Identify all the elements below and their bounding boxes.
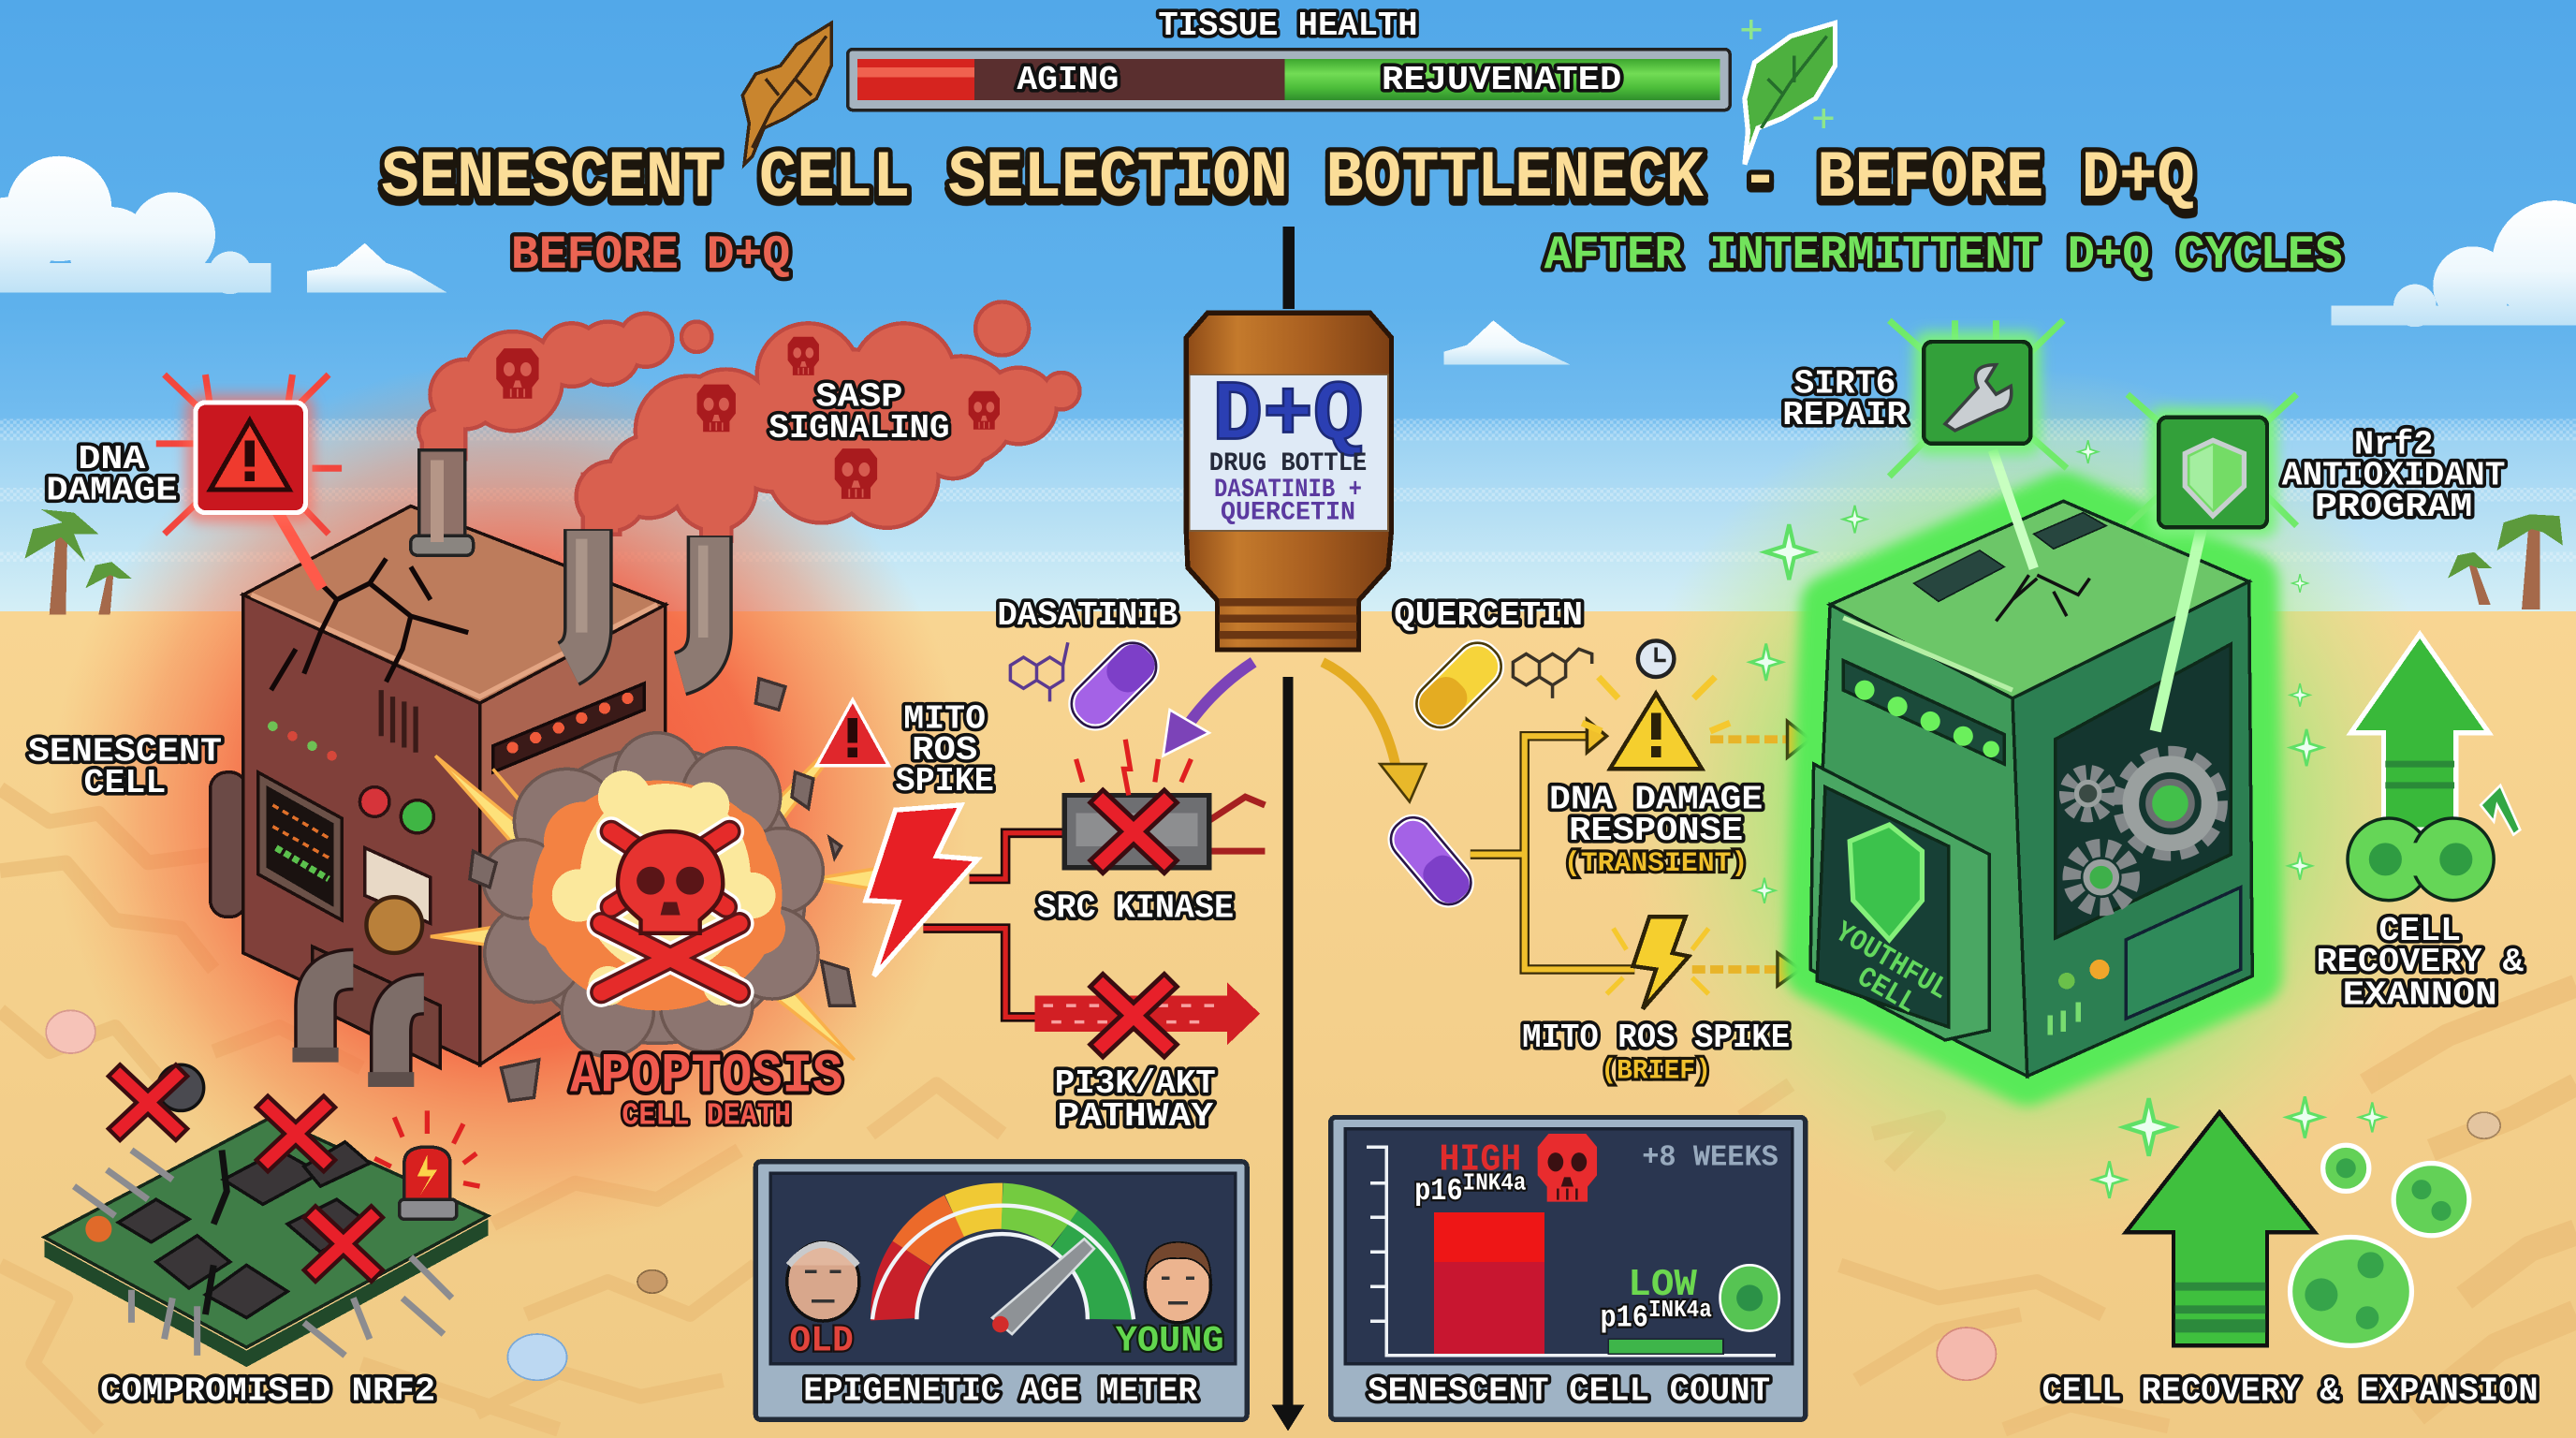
icon: green cell	[1720, 1265, 1779, 1331]
label: youthful cell: YOUTHFUL	[1829, 917, 1954, 1007]
icon: skull	[1538, 1134, 1597, 1202]
panel frame	[755, 1162, 1247, 1419]
label: high: HIGH	[1439, 1139, 1521, 1182]
sensor	[158, 1064, 204, 1110]
bottle neck rings	[1219, 598, 1357, 639]
icon: young face	[1145, 1242, 1211, 1323]
icon: yellow capsule	[1408, 634, 1510, 736]
label: drug bottle: DRUG BOTTLE	[1209, 449, 1367, 478]
label: low: LOW	[1628, 1264, 1698, 1307]
medium cell	[2393, 1164, 2469, 1236]
top vents	[1914, 513, 2106, 601]
panel screen	[1345, 1129, 1793, 1364]
chimney 3	[681, 536, 710, 674]
large cell	[2291, 1238, 2411, 1345]
LED strip	[1843, 661, 2004, 764]
label: mito ROS spike brief: MITO ROS SPIKE	[1522, 1019, 1790, 1057]
label: cell recovery & exannon: RECOVERY &	[2317, 943, 2524, 981]
label: old: OLD	[789, 1321, 854, 1362]
top cracks	[1996, 575, 2089, 621]
chimney 1	[411, 450, 474, 555]
label: compromised NRF2: COMPROMISED NRF2	[100, 1372, 435, 1410]
panel frame	[1331, 1117, 1806, 1419]
label: PI3K/AKT pathway	[1055, 1064, 1216, 1136]
bottle body	[1186, 312, 1392, 649]
title: SENESCENT CELL SELECTION BOTTLENECK - BEFORE D+Q	[381, 142, 2195, 216]
meter frame	[848, 50, 1730, 110]
label: senescent cell count: SENESCENT CELL COUNT	[1368, 1372, 1770, 1410]
label: dasatinib +: DASATINIB +	[1214, 476, 1362, 505]
dial plate	[365, 848, 431, 923]
top face	[1830, 501, 2249, 698]
rusty gear	[366, 897, 422, 953]
label: D+Q: D+Q	[1212, 369, 1364, 465]
label: epigenetic age meter: EPIGENETIC AGE METER	[803, 1372, 1198, 1410]
sand background	[0, 611, 2576, 1438]
icon: yellow warning triangle	[1582, 677, 1730, 769]
senescent cell factory	[211, 450, 710, 1079]
glow: red around senescent cell	[50, 361, 970, 1249]
chart axes	[1367, 1147, 1776, 1356]
icon: SRC kinase chip	[1064, 740, 1265, 873]
small cell	[2323, 1145, 2369, 1191]
label: p16 high: INK4a	[1463, 1169, 1527, 1197]
crack	[205, 1151, 227, 1314]
label: senescent cell: SENESCENT	[28, 733, 222, 771]
smoke skulls	[496, 337, 1000, 499]
palm trees left	[24, 509, 131, 614]
red X marks	[109, 1064, 383, 1282]
green energy beam in window	[2156, 529, 2202, 731]
machine top face	[243, 506, 666, 703]
icon: yellow lightning bolt	[1606, 917, 1708, 1009]
explosion	[431, 679, 912, 1101]
chip burn mark	[85, 1216, 111, 1242]
label: quercetin: QUERCETIN	[1221, 499, 1355, 528]
label: mito ROS spike	[896, 699, 994, 800]
label: DNA damage	[46, 440, 178, 510]
icon: dividing cell	[2348, 818, 2494, 901]
meter dark fill	[857, 59, 1284, 100]
bar: high	[1434, 1212, 1544, 1354]
label: youthful cell: CELL	[1851, 961, 1922, 1021]
cloud: far left	[0, 156, 271, 294]
arrow: DNA damage to cell	[1710, 721, 1810, 757]
red and green buttons	[359, 787, 433, 833]
label: cell recovery & exannon	[2317, 912, 2524, 1014]
arrow: ROS spike to cell	[1692, 953, 1801, 986]
label: SRC kinase: SRC KINASE	[1036, 888, 1234, 927]
arrow: yellow curved	[1323, 662, 1426, 801]
panel screen	[770, 1173, 1236, 1364]
heading: after D+Q cycles: AFTER INTERMITTENT D+Q CYCLES	[1544, 229, 2343, 283]
gauge needle	[992, 1239, 1094, 1334]
top face highlight	[252, 594, 657, 697]
label: apoptosis: APOPTOSIS	[570, 1044, 842, 1108]
label: DNA damage: DNA	[78, 440, 146, 478]
energy rays	[431, 714, 912, 1084]
board side	[44, 1219, 488, 1367]
icon: green leaf	[1741, 20, 1835, 165]
expanding cells	[2291, 1145, 2469, 1345]
yellow branch lines	[1471, 736, 1634, 969]
label: p16 high: p16	[1414, 1174, 1471, 1210]
label: DNA damage response	[1549, 780, 1763, 879]
icon: dead leaf	[742, 23, 831, 165]
shield icon	[1850, 825, 1922, 940]
gauge outline	[872, 1206, 1134, 1319]
label: Nrf2 antioxidant program: Nrf2	[2354, 425, 2433, 463]
label: cell recovery & expansion: CELL RECOVERY & EXPANSION	[2042, 1372, 2539, 1410]
machine left face	[243, 594, 480, 1064]
lower pipes	[292, 969, 424, 1079]
access panel	[313, 946, 440, 1068]
broken connector pins	[74, 1151, 452, 1356]
label: cell recovery & exannon: EXANNON	[2343, 976, 2497, 1014]
cloud: left small	[307, 243, 446, 292]
label: Nrf2 antioxidant program: PROGRAM	[2315, 488, 2472, 526]
left face	[1814, 605, 2027, 1077]
bottom right vent panel	[2126, 888, 2241, 1019]
fire core	[552, 770, 775, 1005]
vents	[381, 690, 416, 753]
right face	[2012, 581, 2252, 1077]
arrow heads on branch	[1587, 720, 1606, 753]
label: cell recovery & exannon: CELL	[2378, 912, 2461, 950]
label: p16 low: INK4a	[1648, 1296, 1712, 1324]
machine monitor	[258, 772, 342, 920]
label: DNA damage: DAMAGE	[46, 472, 178, 510]
icon: curved arrow	[2481, 785, 2520, 835]
machine right face	[480, 605, 666, 1064]
icon: PI3K/AKT pathway arrow	[1035, 974, 1260, 1057]
label: DNA damage response: (TRANSIENT)	[1564, 847, 1748, 879]
panel: epigenetic age meter	[755, 1162, 1247, 1419]
central divider arrow	[1271, 227, 1305, 1431]
palm trees right	[2448, 514, 2563, 609]
siren sparks	[374, 1110, 480, 1186]
arrow: up to cell division	[2351, 634, 2489, 829]
label: aging: AGING	[1017, 61, 1119, 99]
neon outline glow	[1814, 501, 2252, 1077]
sparkles around youthful cell	[1750, 440, 2322, 903]
fire ring	[529, 781, 785, 1010]
label: SIRT6 repair	[1782, 364, 1908, 434]
SIRT6 beam	[1993, 450, 2034, 568]
icon: ROS warning triangle	[816, 700, 889, 766]
label: SASP signaling	[768, 377, 949, 448]
label: Nrf2 antioxidant program: ANTIOXIDANT	[2282, 457, 2505, 495]
label: mito ROS spike brief: (BRIEF)	[1601, 1054, 1711, 1086]
label: cell death: CELL DEATH	[622, 1098, 791, 1134]
D+Q drug bottle	[1186, 312, 1392, 650]
youthful cell machine	[1810, 450, 2252, 1077]
icon: old face	[787, 1242, 859, 1321]
label: mito ROS spike brief	[1522, 1019, 1790, 1086]
icon: purple capsule (active)	[1383, 810, 1479, 913]
shells on the sand	[46, 1010, 2500, 1380]
label: PI3K/AKT pathway: PI3K/AKT	[1055, 1064, 1216, 1103]
red alarm siren	[400, 1147, 457, 1219]
left side pipe	[211, 772, 246, 917]
icon: DNA damage alert	[156, 374, 342, 534]
sand ripples	[0, 788, 2576, 1430]
label: SIRT6 repair: SIRT6	[1794, 364, 1895, 403]
chips	[118, 1142, 370, 1318]
label: rejuvenated: REJUVENATED	[1382, 61, 1621, 99]
label: SASP signaling: SASP	[815, 377, 902, 416]
label: senescent cell	[28, 733, 222, 802]
gears	[2067, 759, 2215, 907]
gauge arc	[894, 1206, 1110, 1319]
shield screen	[1817, 787, 1949, 1027]
bar: low	[1608, 1339, 1723, 1354]
cracks on top	[271, 559, 468, 690]
cloud: centre small	[1444, 320, 1571, 365]
tissue health meter	[848, 7, 1730, 110]
board top	[44, 1117, 488, 1347]
status LEDs	[2050, 960, 2110, 1035]
arrow: purple curved	[1164, 662, 1253, 756]
label: SASP signaling: SIGNALING	[768, 409, 949, 448]
label: young: YOUNG	[1116, 1321, 1224, 1362]
label: mito ROS spike: SPIKE	[896, 762, 994, 800]
icon: Nrf2 shield	[2128, 394, 2297, 537]
big recovery arrow	[2126, 1112, 2315, 1345]
crossbones outline	[601, 831, 739, 992]
label: DNA damage response: DNA DAMAGE	[1549, 780, 1763, 818]
skull and crossbones	[601, 831, 739, 992]
icon: SIRT6 wrench	[1889, 320, 2067, 477]
label: mito ROS spike: MITO	[903, 699, 986, 738]
cloud: right	[2331, 200, 2576, 327]
smoke plumes	[420, 304, 1077, 539]
label: SIRT6 repair: REPAIR	[1782, 396, 1908, 434]
heading: before D+Q: BEFORE D+Q	[511, 229, 790, 283]
LED bar	[493, 683, 644, 772]
smoke puff	[483, 733, 823, 1056]
gear window	[2056, 644, 2231, 938]
glow: green around youthful cell	[1618, 370, 2456, 1240]
icon: quercetin molecule	[1513, 649, 1592, 698]
icon: clock	[1638, 640, 1674, 677]
chimney 2	[568, 529, 588, 664]
icon: red lightning bolt	[866, 805, 977, 976]
label: dasatinib: DASATINIB	[997, 596, 1178, 635]
indicator lights	[268, 721, 337, 761]
top highlight	[1843, 618, 2012, 690]
horizon dither bands	[0, 419, 2576, 562]
heading: tissue health: TISSUE HEALTH	[1158, 7, 1418, 45]
meter green segment	[1284, 59, 1720, 100]
label: +8 weeks: +8 WEEKS	[1642, 1141, 1778, 1174]
label: DNA damage response: RESPONSE	[1569, 812, 1743, 850]
icon: purple capsule	[1062, 634, 1165, 736]
panel: senescent cell count	[1331, 1117, 1806, 1419]
compromised NRF2 circuit board	[44, 1064, 488, 1367]
meter red segment	[857, 59, 974, 100]
crossbones	[601, 831, 739, 992]
icon: dasatinib molecule	[1010, 642, 1068, 701]
label: p16 low: p16	[1600, 1300, 1656, 1336]
sky background	[0, 0, 2576, 613]
sparkles near big arrow	[2094, 1096, 2385, 1198]
skull	[618, 831, 723, 933]
label: senescent cell: CELL	[84, 764, 166, 802]
red pathway wires	[923, 833, 1064, 1017]
skull eyes	[637, 867, 704, 916]
debris rocks	[470, 679, 855, 1101]
label: mito ROS spike: ROS	[912, 731, 977, 770]
DNA damage beam	[276, 509, 322, 588]
label: PI3K/AKT pathway: PATHWAY	[1057, 1097, 1214, 1136]
left lower panel	[1810, 764, 1989, 1040]
label: quercetin: QUERCETIN	[1394, 596, 1583, 635]
bottle label	[1190, 374, 1388, 531]
label: Nrf2 antioxidant program	[2282, 425, 2505, 526]
